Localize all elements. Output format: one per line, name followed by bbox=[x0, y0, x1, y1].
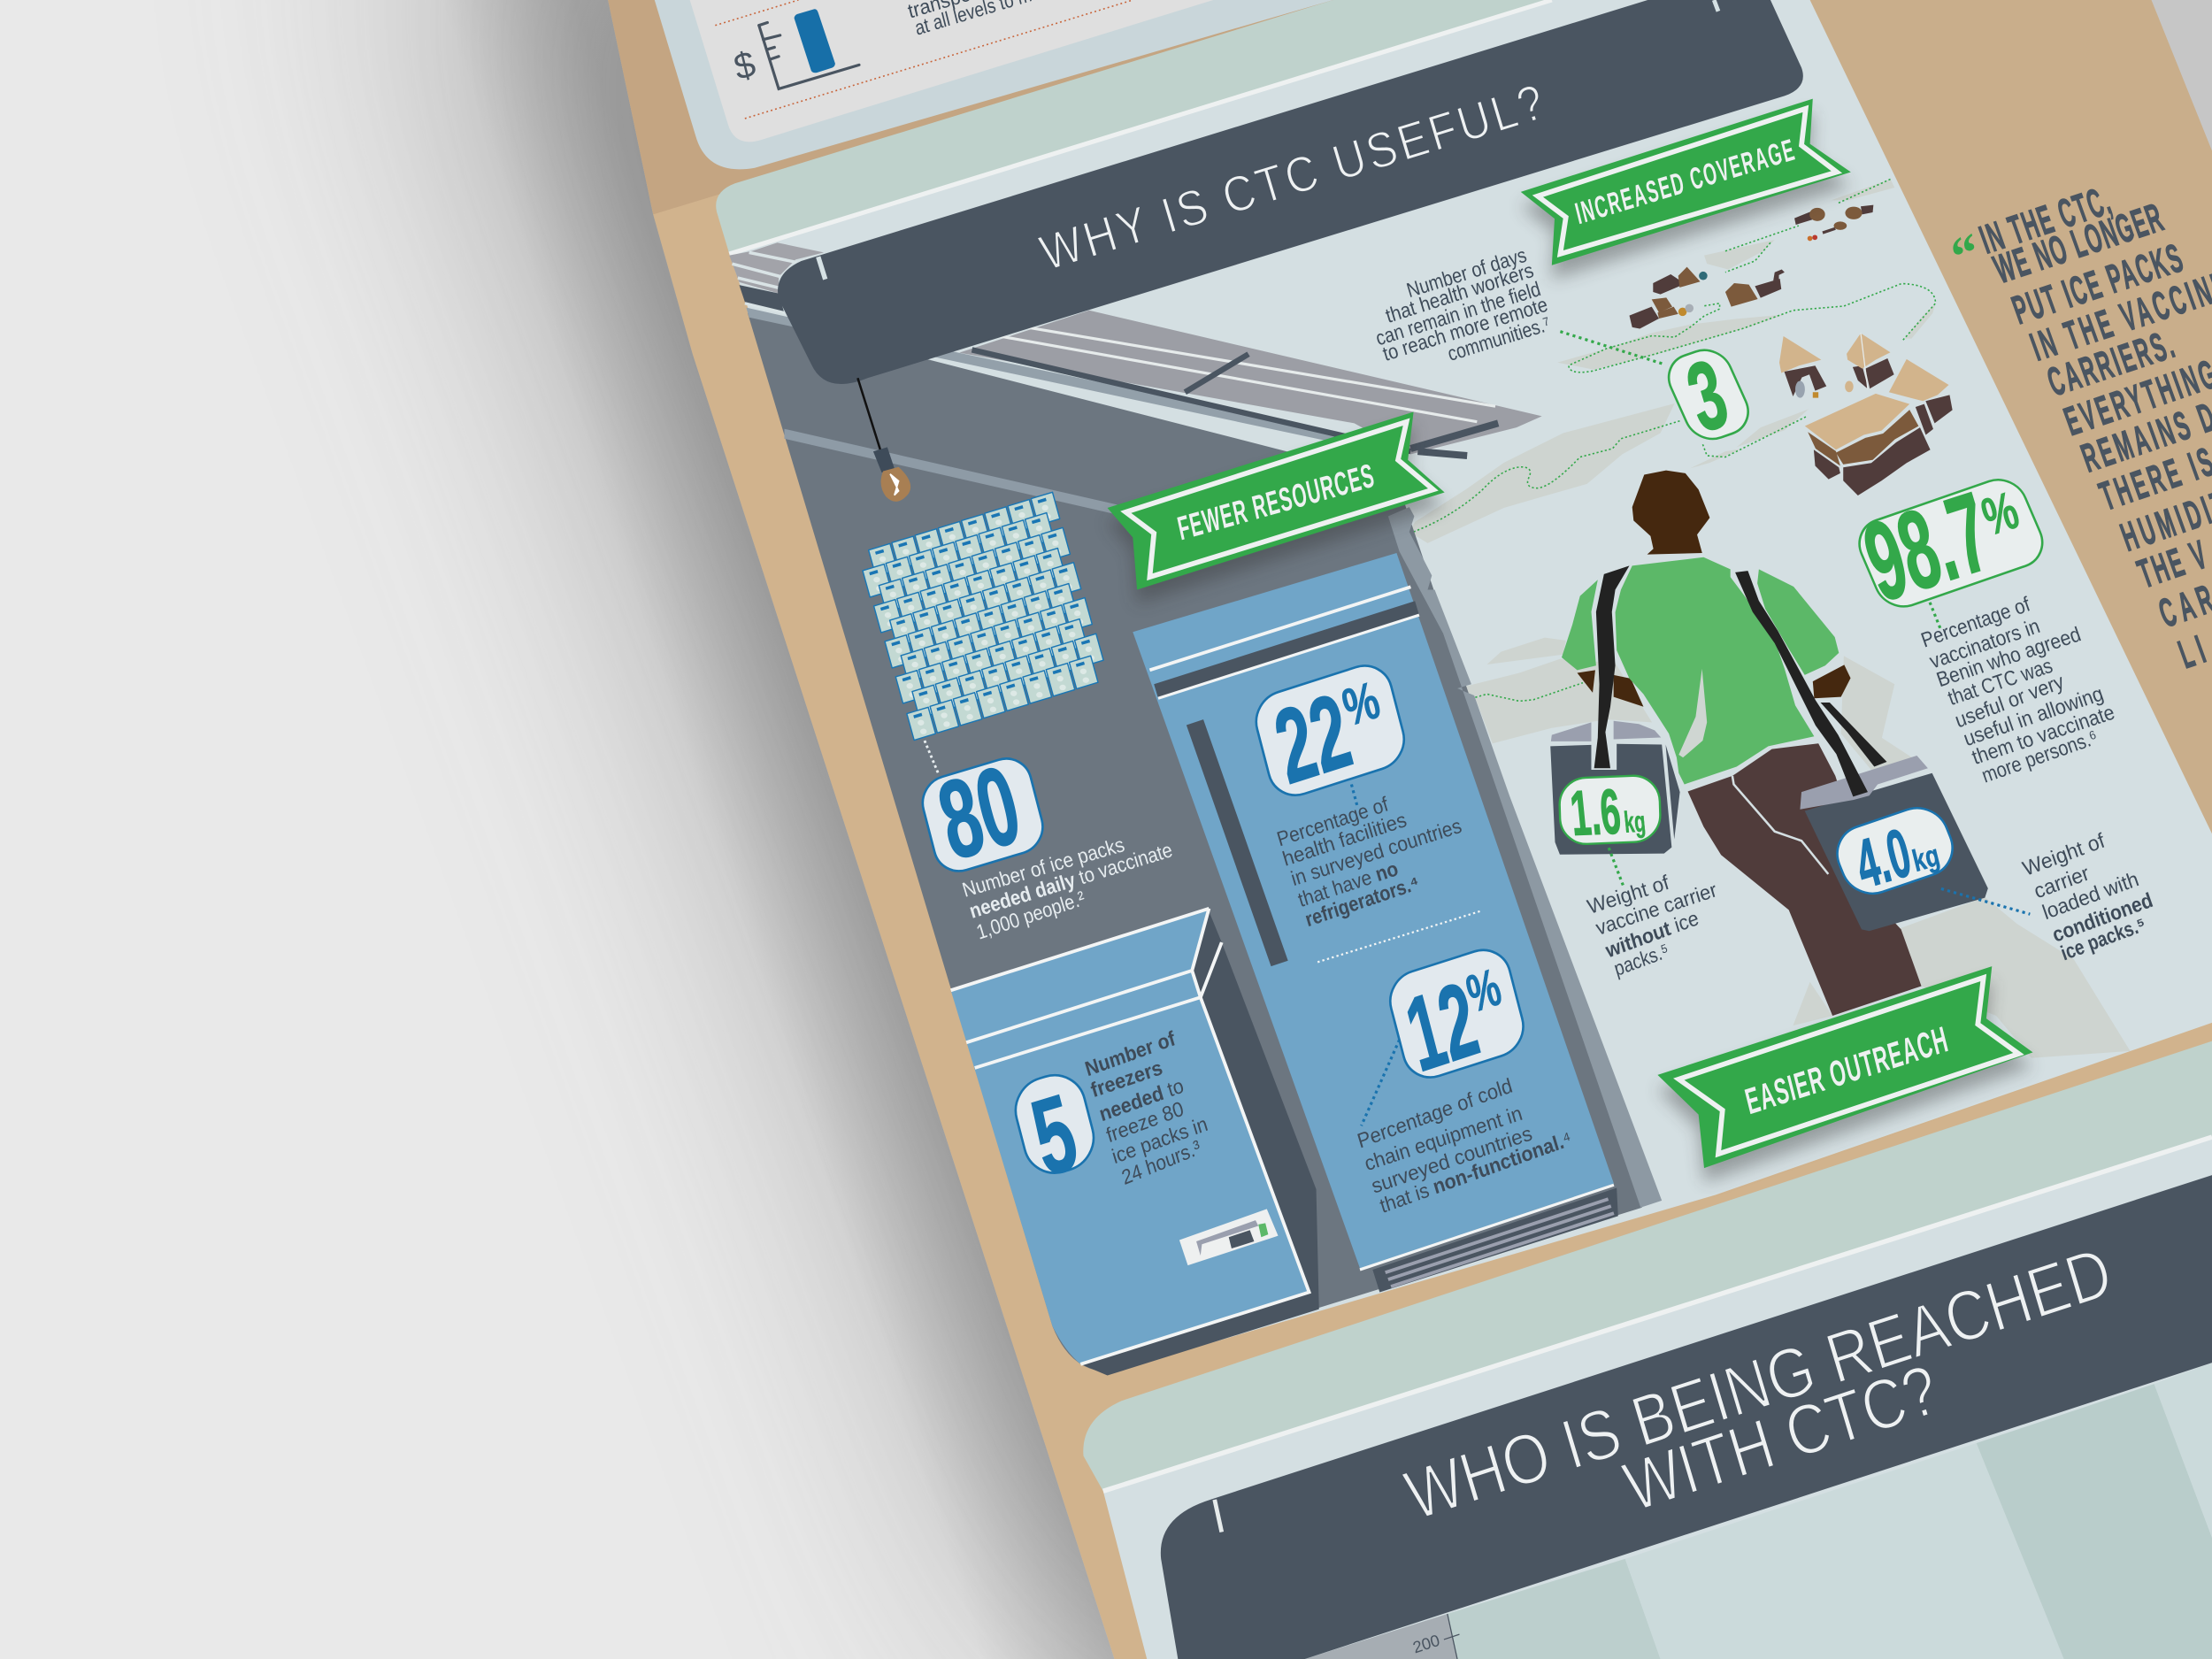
text: vaccinators agree: useful or very bbox=[1952, 670, 2067, 733]
text: vaccinators agree: useful in allowing bbox=[1961, 682, 2107, 751]
text: carrier with conditioned ice packs: ice packs.⁵ bbox=[2058, 913, 2149, 965]
text: vaccinators agree: that CTC was bbox=[1945, 654, 2055, 710]
text: freezers needed: needed to bbox=[1096, 1074, 1187, 1125]
quote text: WE NO LONGER bbox=[1988, 195, 2169, 292]
illustration: upright refrigerator bbox=[1133, 553, 1618, 1292]
stat badge: 12%: 12 bbox=[1395, 960, 1488, 1094]
icon: vaccine carrier with conditioned ice packs bbox=[1800, 756, 1988, 931]
text: non-functional cold chain: chain equipment in bbox=[1362, 1102, 1525, 1175]
stat badge: 3 days: 3 bbox=[1677, 339, 1739, 453]
text: carrier with conditioned ice packs: carrier bbox=[2032, 862, 2093, 903]
text: days in the field: that health workers bbox=[1383, 258, 1536, 327]
illustration: vaccinator walking with carriers bbox=[1562, 471, 1922, 1016]
text: freezers needed: freeze 80 bbox=[1103, 1097, 1187, 1147]
left carrier strap bbox=[1594, 565, 1630, 768]
text: carrier without ice packs: Weight of bbox=[1585, 871, 1672, 918]
text: carrier with conditioned ice packs bbox=[2020, 830, 2156, 965]
illustration: building wall bbox=[748, 313, 1662, 1371]
text: carrier without ice packs: packs.⁵ bbox=[1611, 939, 1671, 980]
text: freezers needed: freezers bbox=[1088, 1056, 1165, 1102]
stat badge: 98.7% bbox=[1851, 468, 2051, 626]
text: vaccinators agree bbox=[1918, 593, 2117, 788]
header band green strip bbox=[716, 0, 1552, 254]
heading: WHY IS CTC USEFUL? bbox=[1034, 74, 1550, 281]
illustration: villages bbox=[1630, 205, 1953, 495]
quote text: LI bbox=[2173, 626, 2211, 677]
stat badge: 1.6 kg: 1.6 bbox=[1567, 777, 1624, 849]
stat badge: 98.7%: 98.7 bbox=[1851, 468, 2003, 626]
text: no refrigerators: that have no bbox=[1295, 856, 1401, 911]
quote text: PUT ICE PACKS bbox=[2006, 234, 2188, 333]
thatched huts bbox=[1779, 333, 1953, 495]
title band: who is being reached bbox=[1161, 1175, 2212, 1659]
ribbon: fewer resources bbox=[1108, 412, 1445, 603]
ribbon: increased coverage: INCREASED COVERAGE bbox=[1572, 133, 1797, 231]
title band: why is CTC useful bbox=[778, 0, 1803, 384]
text: non-functional cold chain: that is non-functional.⁴ bbox=[1378, 1127, 1574, 1217]
illustration: chest freezer bbox=[951, 909, 1319, 1376]
stat badge: 80 bbox=[917, 741, 1048, 884]
text: days in the field: to reach more remote bbox=[1380, 293, 1550, 365]
text: vaccinators agree: more persons.⁶ bbox=[1979, 726, 2101, 788]
text: carrier without ice packs: vaccine carrier bbox=[1593, 878, 1720, 940]
stat badge: 22%: 22 bbox=[1264, 672, 1362, 806]
title band: who is being reached: WITH CTC? bbox=[1616, 1349, 1947, 1527]
stat badge: 12%: % bbox=[1461, 956, 1507, 1024]
text: ice packs needed: needed daily to vaccinate bbox=[967, 838, 1175, 923]
text: no refrigerators: in surveyed countries bbox=[1288, 814, 1464, 890]
second carrier strap bbox=[1821, 703, 1886, 767]
freezer control panel bbox=[1179, 1209, 1279, 1265]
stat badge: 1.6 kg: kg bbox=[1623, 806, 1647, 840]
quote text: IN THE CTC, bbox=[1974, 177, 2116, 263]
text: no refrigerators: Percentage of bbox=[1274, 792, 1391, 850]
text: non-functional cold chain: Percentage of cold bbox=[1355, 1074, 1515, 1153]
text: no refrigerators: refrigerators.⁴ bbox=[1302, 871, 1422, 931]
panel: previous section (cost) bbox=[655, 0, 1333, 169]
text: carrier with conditioned ice packs: conditioned bbox=[2049, 889, 2156, 948]
text: freezers needed bbox=[1082, 1026, 1210, 1190]
ribbon: easier outreach bbox=[1657, 966, 2033, 1182]
text: days in the field: Number of days bbox=[1404, 243, 1529, 302]
stat badge: 4.0 kg: 4.0 bbox=[1849, 815, 1918, 903]
panel: who is being reached bbox=[1083, 1041, 2212, 1659]
text: carrier with conditioned ice packs: loaded with bbox=[2039, 868, 2142, 925]
text: carrier with conditioned ice packs: Weight of bbox=[2020, 830, 2108, 881]
text: carrier without ice packs: without ice bbox=[1602, 906, 1701, 963]
text: vaccinators agree: Percentage of bbox=[1918, 593, 2033, 652]
text: carrier without ice packs bbox=[1585, 871, 1720, 980]
text: days in the field: can remain in the field bbox=[1373, 277, 1543, 349]
quote text bbox=[1974, 177, 2212, 677]
text: vaccinators agree: them to vaccinate bbox=[1969, 701, 2117, 769]
ribbon: easier outreach: EASIER OUTREACH bbox=[1741, 1019, 1952, 1123]
text: no refrigerators bbox=[1274, 792, 1464, 931]
illustration: 80 ice packs bbox=[863, 492, 1103, 773]
chart columns bbox=[1305, 1363, 2212, 1659]
illustration: green walking trails bbox=[1414, 179, 1936, 701]
text: days in the field: communities.⁷ bbox=[1445, 311, 1553, 365]
stat badge: 4.0 kg: kg bbox=[1909, 839, 1943, 879]
text: ice packs needed: Number of ice packs bbox=[960, 833, 1127, 902]
text: freezers needed: 24 hours.³ bbox=[1119, 1136, 1203, 1190]
stat badge: 5 freezers: 5 bbox=[1021, 1071, 1087, 1199]
trousers bbox=[1688, 743, 1922, 1016]
ribbon: fewer resources: FEWER RESOURCES bbox=[1174, 457, 1377, 548]
hands bbox=[1578, 664, 1851, 707]
text: non-functional cold chain bbox=[1355, 1074, 1574, 1217]
stat badge: 80: 80 bbox=[927, 741, 1032, 884]
text: no refrigerators: health facilities bbox=[1279, 808, 1409, 871]
text: vaccinators agree: vaccinators in bbox=[1927, 615, 2043, 673]
illustration: corrugated roof bbox=[729, 242, 1542, 456]
text: non-functional cold chain: surveyed countries bbox=[1369, 1122, 1535, 1198]
text: freezers needed: Number of bbox=[1082, 1026, 1178, 1080]
chart axis label: 200 — bbox=[1410, 1624, 1463, 1656]
stat badge: 22%: % bbox=[1337, 670, 1386, 738]
text: days in the field bbox=[1373, 243, 1553, 365]
ribbon: increased coverage bbox=[1521, 99, 1851, 280]
text: freezers needed: ice packs in bbox=[1110, 1112, 1210, 1168]
quote on tan margin bbox=[1945, 177, 2212, 677]
stat badge: 98.7%: % bbox=[1976, 480, 2024, 547]
quote text: CARRIERS. bbox=[2041, 321, 2180, 405]
head bbox=[1632, 471, 1709, 555]
text: ice packs needed: 1,000 people.² bbox=[973, 887, 1087, 944]
icon: cost bar bbox=[730, 9, 859, 88]
icon: hanging light bulb bbox=[857, 378, 910, 502]
shirt bbox=[1562, 557, 1839, 784]
right carrier strap bbox=[1735, 571, 1868, 796]
illustration: ground and shadows bbox=[1409, 179, 2131, 1058]
icon: cost bar: $ bbox=[730, 43, 759, 88]
icon: vaccine carrier without ice packs bbox=[1550, 721, 1680, 855]
icon: green quotation mark: “ bbox=[1945, 222, 1987, 287]
quote text: THE V bbox=[2131, 532, 2212, 596]
poster sheet bbox=[608, 0, 2212, 1659]
text: vaccinators agree: Benin who agreed bbox=[1933, 622, 2084, 691]
panel: why is CTC useful bbox=[716, 0, 2212, 1376]
